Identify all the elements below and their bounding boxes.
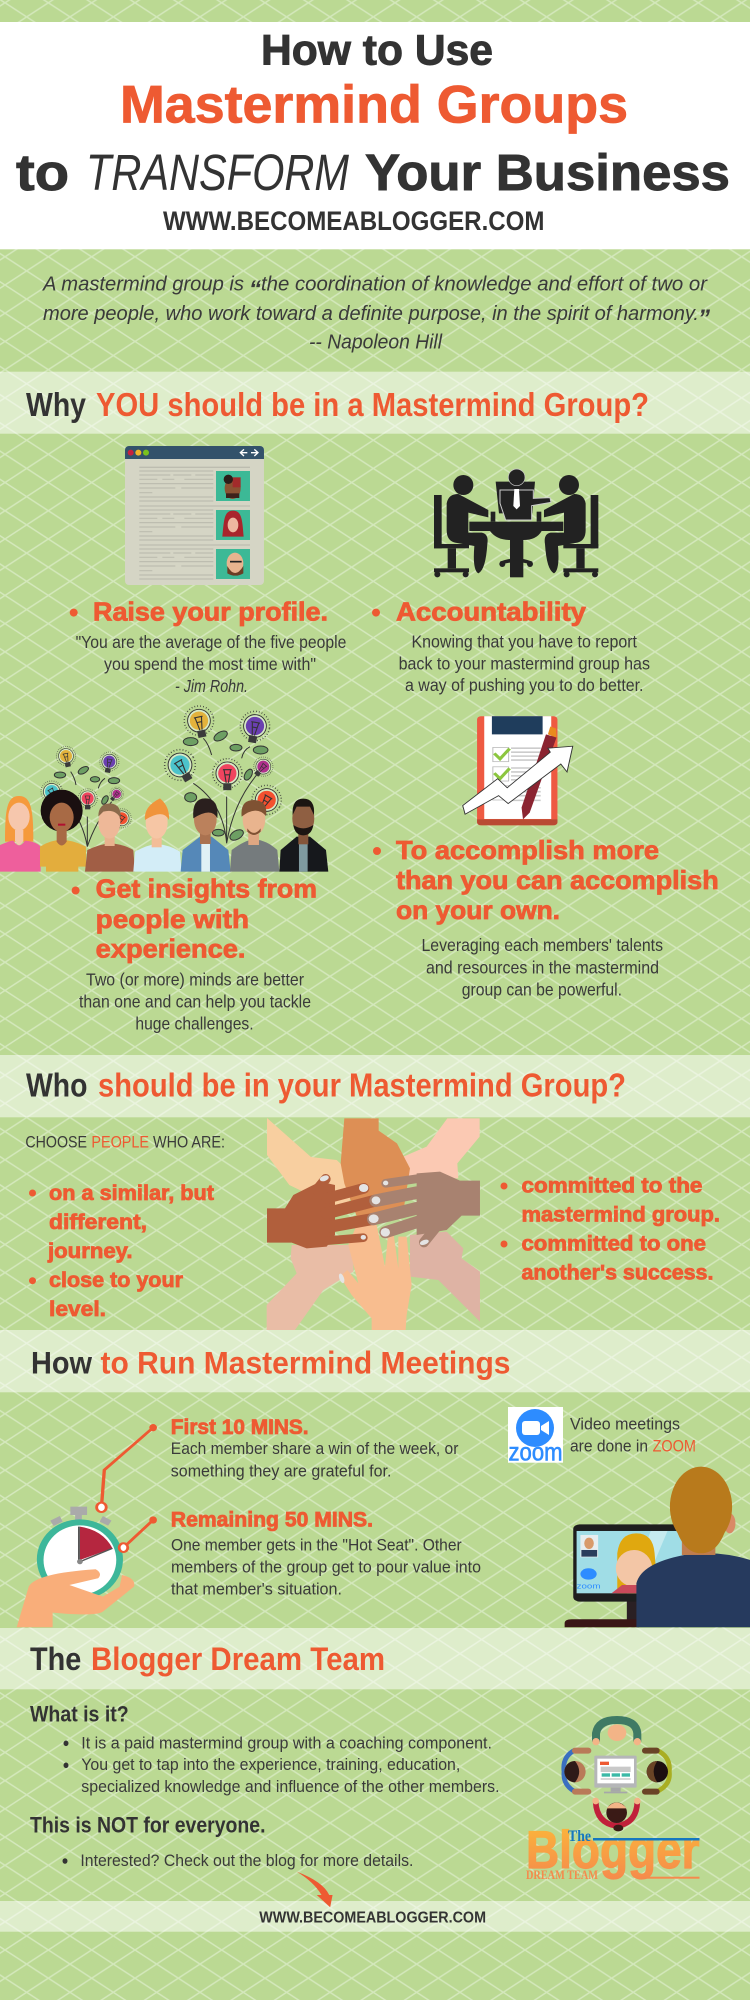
logo: the blogger dream team: DREAM TEAM bbox=[526, 1868, 598, 1882]
section heading: how to run: to Run Mastermind Meetings bbox=[100, 1344, 510, 1380]
logo: the blogger dream team: The bbox=[568, 1828, 591, 1845]
center figure and table bbox=[469, 469, 563, 577]
text: what is it: specialized knowledge and influence of the other members. bbox=[81, 1778, 500, 1796]
label: choose people who are: WHO ARE: bbox=[153, 1133, 225, 1151]
woman with afro bbox=[40, 790, 86, 872]
right person bbox=[645, 1750, 669, 1792]
step: remaining 50 mins: One member gets in the "Hot Seat". Other bbox=[171, 1537, 462, 1555]
point: get insights: Two (or more) minds are better bbox=[86, 969, 304, 989]
section heading: who: should be in your Mastermind Group? bbox=[98, 1067, 626, 1104]
point: get insights: Get insights from bbox=[96, 874, 317, 904]
bulbs bbox=[37, 703, 287, 833]
text: video meetings in zoom: are done in bbox=[570, 1437, 648, 1455]
point: accomplish more: Leveraging each members' talents bbox=[422, 935, 663, 955]
illustration: stacked hands bbox=[267, 1118, 480, 1330]
left figure bbox=[434, 475, 488, 577]
man in grey shirt bbox=[230, 800, 279, 872]
quote by Napoleon Hill: “ bbox=[249, 276, 261, 303]
man in light blue shirt bbox=[133, 798, 182, 872]
point: get insights bbox=[72, 874, 317, 1034]
quote by Napoleon Hill: ” bbox=[698, 305, 710, 332]
title line: to TRANSFORM Your Business bbox=[16, 144, 730, 201]
title line: to TRANSFORM Your Business: TRANSFORM bbox=[86, 144, 349, 201]
quote by Napoleon Hill: the coordination of knowledge and effort of two or bbox=[261, 274, 708, 296]
list: left criteria: journey. bbox=[47, 1240, 132, 1263]
man in black jacket bbox=[279, 799, 328, 872]
arrow to url bbox=[297, 1872, 333, 1907]
footer band with url bbox=[0, 1901, 750, 1932]
label: choose people who are: CHOOSE bbox=[25, 1133, 87, 1151]
text: what is it: It is a paid mastermind group with a coaching component. bbox=[81, 1734, 492, 1752]
point: get insights: huge challenges. bbox=[135, 1014, 254, 1034]
illustration: team around a monitor bbox=[564, 1720, 669, 1831]
man in blue jacket bbox=[181, 798, 231, 872]
point: accountability: back to your mastermind group has bbox=[399, 654, 650, 674]
section heading: why: Why bbox=[26, 386, 87, 423]
section heading: blogger dream team: The bbox=[30, 1641, 81, 1677]
step: first 10 mins: something they are grateful for. bbox=[171, 1463, 391, 1481]
point: accomplish more: group can be powerful. bbox=[462, 980, 622, 1000]
bottom person bbox=[592, 1798, 641, 1831]
text: what is it bbox=[30, 1702, 500, 1796]
monitor bbox=[594, 1756, 637, 1793]
label: choose people who are: PEOPLE bbox=[91, 1133, 149, 1151]
label: choose people who are bbox=[25, 1133, 225, 1151]
man in brown shirt bbox=[85, 803, 135, 872]
list: left criteria: level. bbox=[49, 1298, 106, 1321]
text: not for everyone bbox=[30, 1813, 413, 1870]
text: video meetings in zoom: ZOOM bbox=[653, 1437, 696, 1455]
illustration: people with idea bulbs bbox=[0, 703, 328, 872]
point: raise your profile bbox=[70, 596, 346, 696]
step: first 10 mins: Each member share a win of the week, or bbox=[171, 1440, 459, 1458]
illustration: man on video call: zoom bbox=[577, 1582, 601, 1590]
point: accountability: Accountability bbox=[396, 596, 587, 626]
list: left criteria bbox=[29, 1182, 214, 1321]
point: accomplish more: than you can accomplish bbox=[396, 865, 719, 895]
website url: WWW.BECOMEABLOGGER.COM bbox=[163, 206, 544, 236]
footer band with url: WWW.BECOMEABLOGGER.COM bbox=[259, 1910, 486, 1927]
text: not for everyone: Interested? Check out the blog for more details. bbox=[80, 1852, 413, 1870]
quote by Napoleon Hill bbox=[42, 274, 710, 353]
icon: stopwatch in hand with leader lines bbox=[17, 1424, 157, 1627]
dark hand bbox=[267, 1179, 375, 1248]
point: accomplish more: To accomplish more bbox=[396, 835, 659, 865]
icon: zoom logo bbox=[508, 1407, 563, 1467]
section heading: blogger dream team: Blogger Dream Team bbox=[91, 1641, 385, 1677]
point: accountability bbox=[372, 596, 650, 695]
point: get insights: than one and can help you tackle bbox=[79, 992, 311, 1012]
brown hand bbox=[373, 1172, 480, 1242]
step: first 10 mins bbox=[171, 1416, 459, 1481]
icon: clipboard with rising arrow bbox=[463, 716, 573, 825]
text: what is it: You get to tap into the experience, training, education, bbox=[81, 1756, 460, 1774]
woman in pink bbox=[0, 796, 41, 872]
list: right criteria: mastermind group. bbox=[522, 1204, 720, 1227]
left person bbox=[564, 1750, 588, 1792]
list: left criteria: different, bbox=[49, 1211, 147, 1234]
title line: to TRANSFORM Your Business: to bbox=[16, 144, 69, 201]
point: raise your profile: you spend the most time with" bbox=[104, 654, 316, 674]
stems and leaves bbox=[54, 729, 268, 847]
icon: zoom logo: zoom bbox=[508, 1439, 562, 1467]
quote by Napoleon Hill: -- Napoleon Hill bbox=[309, 331, 442, 353]
text: video meetings in zoom: Video meetings bbox=[570, 1415, 680, 1433]
text: not for everyone: This is NOT for everyone. bbox=[30, 1813, 266, 1838]
point: accomplish more: on your own. bbox=[396, 895, 560, 925]
section heading: how to run: How bbox=[31, 1344, 92, 1380]
quote by Napoleon Hill: A mastermind group is bbox=[42, 274, 244, 296]
text: what is it: What is it? bbox=[30, 1702, 129, 1727]
illustration: man on video call bbox=[565, 1467, 750, 1627]
title panel bbox=[0, 22, 750, 249]
section heading: why bbox=[0, 372, 750, 434]
section heading: who: Who bbox=[26, 1067, 88, 1104]
step: remaining 50 mins: members of the group get to pour value into bbox=[171, 1559, 481, 1577]
title line: Mastermind Groups: Mastermind Groups bbox=[120, 76, 628, 135]
section heading: how to run bbox=[0, 1330, 750, 1392]
point: get insights: people with bbox=[96, 904, 249, 934]
logo: the blogger dream team: Blogger bbox=[526, 1821, 700, 1880]
step: remaining 50 mins: Remaining 50 MINS. bbox=[171, 1509, 373, 1532]
point: accomplish more bbox=[373, 835, 719, 1000]
section heading: blogger dream team bbox=[0, 1628, 750, 1689]
step: first 10 mins: First 10 MINS. bbox=[171, 1416, 309, 1439]
right figure bbox=[544, 475, 598, 577]
point: accountability: Knowing that you have to report bbox=[412, 631, 637, 651]
title line: How to Use: How to Use bbox=[261, 26, 493, 74]
quote by Napoleon Hill: more people, who work toward a definite purpose, in the spirit of harmony. bbox=[43, 303, 699, 325]
list: left criteria: on a similar, but bbox=[49, 1182, 214, 1205]
point: raise your profile: - Jim Rohn. bbox=[175, 676, 248, 696]
fingernails bbox=[319, 1174, 429, 1284]
point: raise your profile: Raise your profile. bbox=[93, 596, 328, 626]
list: right criteria: committed to the bbox=[522, 1175, 702, 1198]
step: remaining 50 mins bbox=[171, 1509, 481, 1599]
point: accomplish more: and resources in the mastermind bbox=[426, 958, 659, 978]
section heading: why: YOU should be in a Mastermind Group? bbox=[96, 386, 649, 423]
top person bbox=[592, 1720, 641, 1745]
icon: browser profile page bbox=[125, 446, 264, 585]
point: accountability: a way of pushing you to do better. bbox=[405, 675, 644, 695]
text: video meetings in zoom bbox=[570, 1415, 696, 1455]
list: left criteria: close to your bbox=[49, 1269, 183, 1292]
section heading: who bbox=[0, 1055, 750, 1117]
icon: meeting silhouettes bbox=[434, 469, 598, 577]
list: right criteria: committed to one bbox=[522, 1233, 706, 1256]
point: raise your profile: "You are the average of the five people bbox=[76, 632, 346, 652]
title line: to TRANSFORM Your Business: Your Business bbox=[365, 144, 730, 201]
list: right criteria bbox=[500, 1175, 720, 1285]
step: remaining 50 mins: that member's situation. bbox=[171, 1581, 342, 1599]
list: right criteria: another's success. bbox=[522, 1262, 713, 1285]
point: get insights: experience. bbox=[96, 934, 246, 964]
